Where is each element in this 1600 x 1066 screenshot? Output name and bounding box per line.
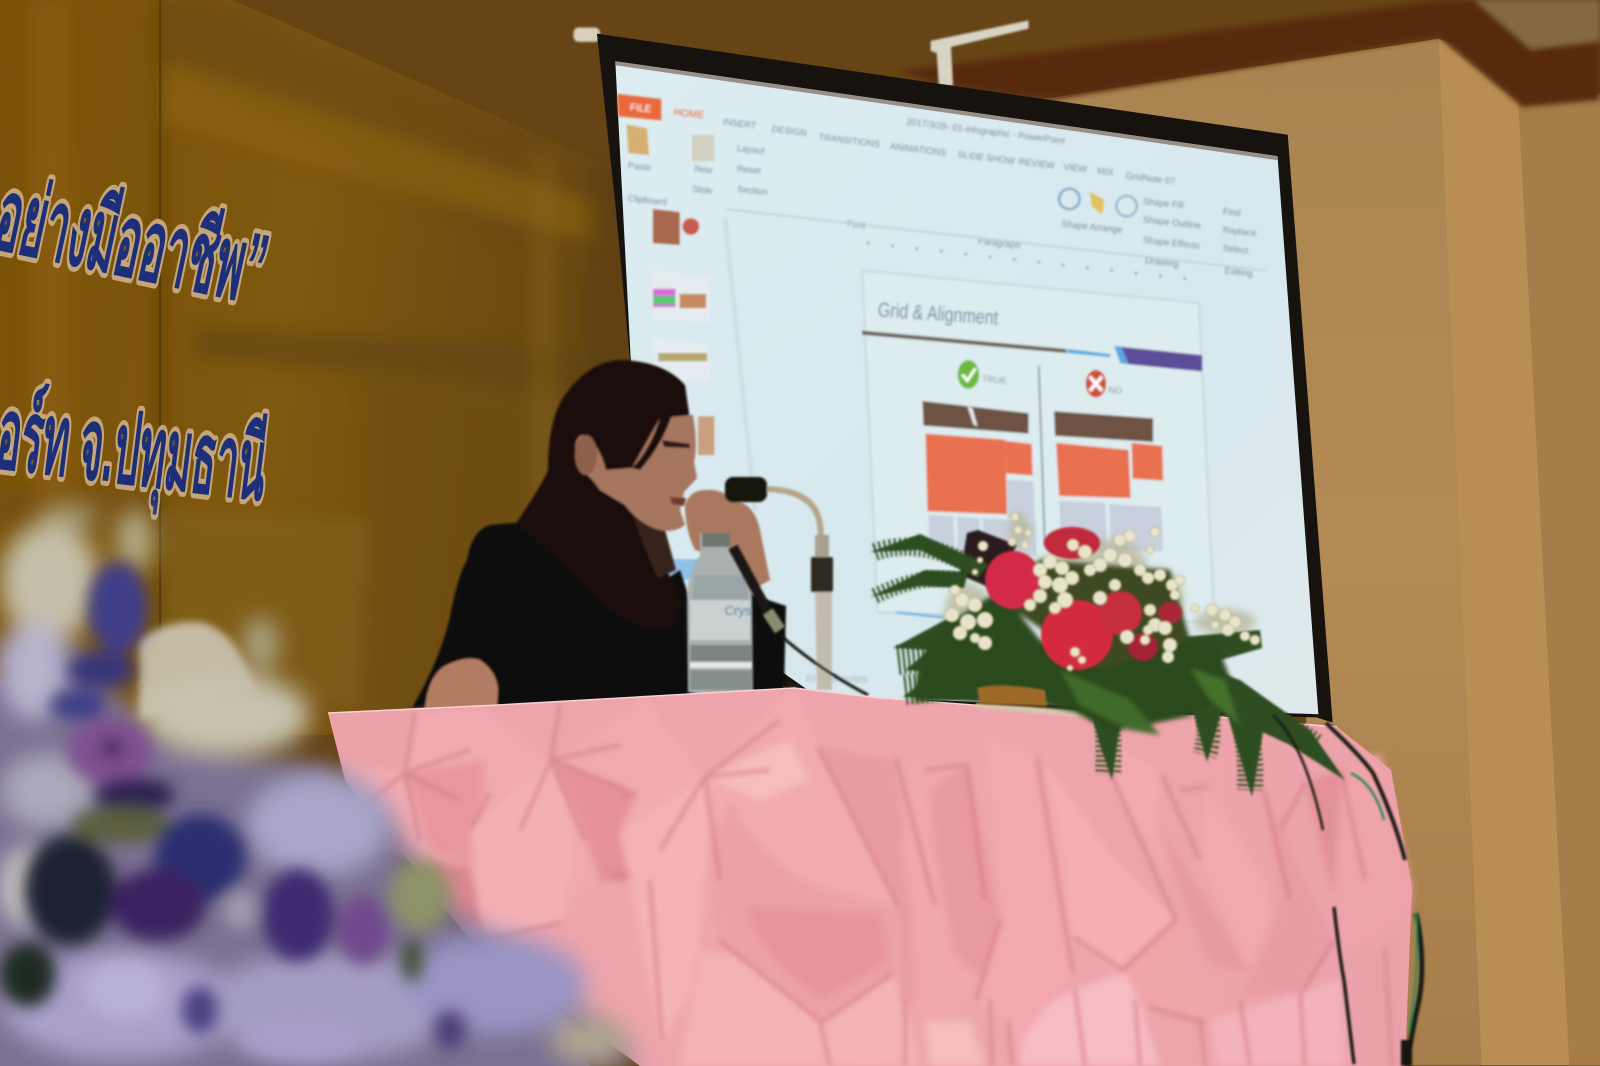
hair	[517, 360, 690, 631]
ribbon: Paste	[627, 160, 652, 173]
lower skirt panels	[680, 930, 1400, 1066]
ribbon: Layout	[737, 143, 765, 156]
white daisy sprays	[945, 513, 1260, 671]
bow 2	[470, 700, 650, 940]
ribbon: ANIMATIONS	[890, 141, 947, 158]
ribbon: Shape Arrange	[1061, 219, 1123, 235]
ceiling beam	[898, 0, 1600, 107]
ribbon: Shape Outline	[1143, 214, 1202, 231]
ribbon: New	[694, 163, 713, 175]
water bottle: Crys	[725, 603, 752, 618]
floral arrangement	[870, 512, 1345, 797]
microphone stand	[725, 477, 868, 695]
no badge: NO	[1108, 385, 1123, 396]
soft spray background	[944, 512, 1255, 647]
bow drapes	[344, 688, 1412, 1045]
foreground blurred flowers	[0, 503, 640, 1066]
ribbon	[617, 94, 1265, 280]
ceiling	[0, 0, 1600, 306]
file tab	[617, 94, 661, 120]
ribbon: Editing	[1224, 266, 1253, 278]
eye	[662, 440, 690, 448]
right wall with pillar	[1020, 39, 1600, 1065]
ribbon: Shape Fill	[1143, 196, 1184, 210]
ribbon: VIEW	[1063, 161, 1088, 174]
hand at mouth	[685, 490, 770, 590]
hanging cables	[1273, 715, 1422, 1066]
true badge: TRUE	[981, 374, 1007, 386]
ribbon: Drawing	[1145, 255, 1179, 269]
presenter	[412, 360, 786, 708]
slide title: Grid & Alignment	[877, 299, 999, 330]
ribbon: Clipboard	[627, 193, 667, 207]
title rule	[862, 331, 1202, 371]
bow 3	[620, 688, 899, 1022]
true badge	[958, 360, 1007, 389]
projector screen frame	[597, 34, 1333, 722]
ribbon: Replace	[1222, 225, 1257, 238]
ribbon: Reset	[737, 163, 762, 176]
notes prompt: to add notes	[806, 673, 868, 686]
red carnations	[985, 527, 1182, 670]
right bows	[901, 763, 1001, 1017]
resting hand	[425, 659, 498, 708]
neck shadow	[630, 505, 676, 578]
bow 1	[344, 710, 490, 868]
face	[575, 415, 697, 531]
ribbon: FILE	[629, 102, 652, 115]
ribbon: Shape Effects	[1143, 235, 1201, 251]
ribbon: DESIGN	[771, 124, 807, 138]
ribbon: Font	[847, 219, 866, 230]
ribbon: TRANSITIONS	[818, 132, 881, 149]
projected slide: PowerPoint window	[615, 61, 1318, 714]
ribbon: Find	[1222, 206, 1241, 218]
golden curtain backdrop	[0, 0, 638, 735]
flower pot	[977, 685, 1047, 706]
true layout grid	[922, 401, 1037, 556]
water bottle	[687, 533, 753, 696]
ribbon: REVIEW	[1018, 156, 1056, 171]
ribbon: Section	[737, 184, 768, 197]
fringe strands	[632, 415, 672, 470]
right arm	[686, 590, 786, 698]
slide page	[862, 270, 1214, 622]
ribbon: Slide	[692, 184, 713, 196]
ribbon: Select	[1222, 243, 1249, 256]
table skirt	[328, 688, 1412, 1066]
lips	[670, 497, 686, 506]
fern fronds	[870, 534, 1345, 797]
ribbon: MIX	[1097, 166, 1114, 177]
lower pleats	[820, 950, 1392, 1066]
foliage mass	[915, 560, 1240, 735]
black object behind flowers	[960, 530, 1017, 590]
ribbon: SLIDE SHOW	[957, 149, 1016, 166]
ear	[575, 435, 597, 475]
soft base colour	[0, 640, 640, 1066]
jacket	[412, 522, 690, 708]
ribbon: INSERT	[722, 117, 757, 131]
cream table top strip	[976, 703, 1110, 720]
ribbon: Paragraph	[977, 236, 1021, 250]
ribbon: HOME	[673, 107, 705, 122]
divider	[1039, 365, 1045, 546]
projector bracket	[573, 20, 1029, 86]
ribbon: 2017/3/28- 01-infographic - PowerPoint	[906, 117, 1066, 146]
thumbnails	[651, 209, 757, 580]
no badge	[1086, 370, 1123, 397]
no layout grid	[1054, 411, 1163, 551]
solid base colour	[0, 680, 590, 1066]
chair cover	[138, 622, 255, 720]
ribbon: GridNote 07	[1125, 171, 1176, 187]
bow creases	[372, 705, 1365, 1040]
